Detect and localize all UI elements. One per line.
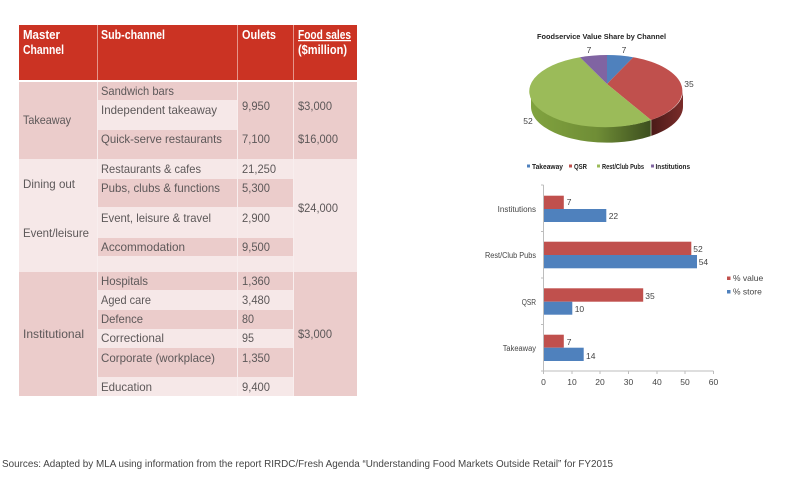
outlet counts: 1,360 [242, 274, 270, 288]
panel: channel table [19, 25, 357, 396]
x axis tick labels [541, 377, 718, 387]
category labels: Rest/Club Pubs [485, 251, 536, 260]
pie data labels: 7 [587, 45, 592, 55]
bar legend [727, 273, 764, 296]
pie legend: Takeaway [532, 164, 563, 171]
outlet counts: 21,250 [242, 162, 276, 176]
food sales values: $3,000 [298, 99, 332, 113]
pie chart: foodservice value share [523, 32, 694, 171]
bar value labels: 54 [699, 257, 708, 267]
outlet counts: 9,500 [242, 240, 270, 254]
pie data labels: 7 [622, 45, 627, 55]
pie legend: QSR [574, 164, 587, 171]
bar value labels: 7 [567, 197, 572, 207]
master channel labels [23, 113, 89, 341]
x axis tick labels: 10 [567, 377, 577, 387]
source note: Sources: Adapted by MLA using information from the report RIRDC/Fresh Agenda “Understanding Food Markets Outside Retail” for FY2015 [2, 459, 613, 470]
bar legend: % store [733, 286, 762, 296]
sub-channel labels: Event, leisure & travel [101, 211, 211, 225]
x axis tick labels: 0 [541, 377, 546, 387]
outlet counts: 9,400 [242, 380, 270, 394]
outlet counts: 5,300 [242, 181, 270, 195]
sub-channel labels: Aged care [101, 293, 151, 307]
table header row: Channel [23, 43, 64, 57]
chart axes [541, 185, 714, 374]
sub-channel labels: Hospitals [101, 274, 148, 288]
pie data labels [523, 45, 694, 126]
x axis tick labels: 20 [595, 377, 605, 387]
bar value labels: 22 [609, 211, 618, 221]
bar value labels: 52 [693, 244, 703, 254]
sub-channel labels: Quick-serve restaurants [101, 132, 222, 146]
category labels: Institutions [498, 205, 536, 214]
outlet counts: 7,100 [242, 132, 270, 146]
bar legend: % value [733, 273, 764, 283]
table body cell backgrounds [19, 82, 357, 396]
pie legend: Institutions [656, 164, 690, 171]
sub-channel labels: Defence [101, 312, 143, 326]
x axis tick labels: 30 [624, 377, 633, 387]
food sales values [298, 99, 338, 341]
table header row [19, 25, 357, 80]
outlet counts: 2,900 [242, 211, 270, 225]
food sales values: $3,000 [298, 327, 332, 341]
sub-channel labels: Sandwich bars [101, 84, 174, 98]
pie legend: Rest/Club Pubs [602, 164, 644, 171]
master channel labels: Event/leisure [23, 226, 89, 240]
pie title: Foodservice Value Share by Channel [537, 32, 666, 41]
x axis tick labels: 60 [709, 377, 718, 387]
outlet counts: 9,950 [242, 99, 270, 113]
table header row: Food sales [298, 28, 351, 42]
table header row: Master [23, 28, 60, 42]
table header row: ($million) [298, 43, 347, 57]
sub-channel labels: Accommodation [101, 240, 185, 254]
bars [544, 196, 697, 361]
outlet counts: 95 [242, 331, 254, 345]
table header row: Sub-channel [101, 28, 165, 42]
sub-channel labels: Corporate (workplace) [101, 351, 215, 365]
bar chart: % value vs % store [485, 185, 764, 387]
bar value labels: 14 [586, 351, 596, 361]
food sales values: $16,000 [298, 132, 338, 146]
bar value labels: 7 [567, 337, 572, 347]
category labels: QSR [522, 298, 536, 307]
pie data labels: 52 [523, 116, 533, 126]
table header row: Oulets [242, 28, 276, 42]
pie legend [527, 164, 690, 171]
master channel labels: Takeaway [23, 113, 71, 127]
category labels: Takeaway [503, 344, 536, 353]
master channel labels: Dining out [23, 177, 76, 191]
sub-channel labels: Independent takeaway [101, 103, 217, 117]
outlet counts: 3,480 [242, 293, 270, 307]
category labels [485, 205, 536, 353]
outlet counts [242, 99, 276, 394]
outlet counts: 1,350 [242, 351, 270, 365]
x axis tick labels: 50 [680, 377, 690, 387]
sub-channel labels: Restaurants & cafes [101, 162, 201, 176]
outlet counts: 80 [242, 312, 254, 326]
sub-channel labels: Pubs, clubs & functions [101, 181, 220, 195]
bar value labels: 35 [645, 291, 655, 301]
pie body [529, 55, 683, 143]
sub-channel labels: Correctional [101, 331, 164, 345]
master channel labels: Institutional [23, 327, 84, 341]
x axis tick labels: 40 [652, 377, 662, 387]
pie data labels: 35 [684, 79, 694, 89]
sub-channel labels [101, 84, 222, 394]
bar value labels: 10 [575, 304, 584, 314]
food sales values: $24,000 [298, 201, 338, 215]
sub-channel labels: Education [101, 380, 152, 394]
bar value labels [567, 197, 708, 361]
